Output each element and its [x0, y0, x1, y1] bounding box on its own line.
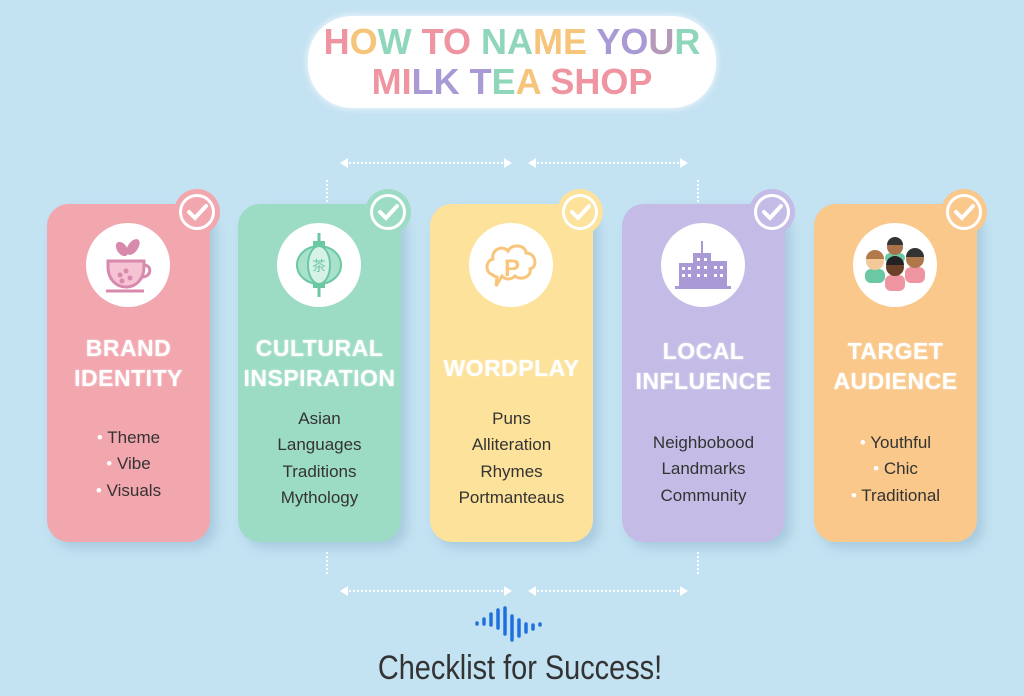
bullets: Languages: [277, 435, 362, 454]
bullets: Mythology: [281, 488, 358, 507]
heading: LOCAL: [663, 338, 744, 364]
icon: sound wave: [475, 606, 542, 642]
icon: people: [853, 223, 937, 307]
bullets: • Theme: [97, 428, 160, 447]
heading: AUDIENCE: [833, 368, 958, 394]
footer text: Checklist for Success!: [378, 649, 662, 687]
heading: WORDPLAY: [443, 355, 580, 381]
heading: INFLUENCE: [635, 368, 772, 394]
check badge: [941, 189, 987, 235]
title: HOW TO NAME YOUR: [324, 21, 700, 62]
bullets: [851, 433, 940, 505]
heading: [74, 335, 183, 391]
check badge: [749, 189, 795, 235]
panel: cultural inspiration: [238, 204, 401, 542]
bullets: Community: [661, 486, 746, 505]
bullets: Alliteration: [472, 435, 551, 454]
check badge: [557, 189, 603, 235]
bullets: • Traditional: [851, 486, 940, 505]
panel: brand identity: [47, 204, 210, 542]
heading: INSPIRATION: [243, 365, 396, 391]
bullets: Neighbobood: [653, 433, 754, 452]
check badge: [365, 189, 411, 235]
bullets: [459, 409, 564, 507]
panel: local influence: [622, 204, 785, 542]
bullets: Rhymes: [480, 462, 543, 481]
heading: BRAND: [86, 335, 171, 361]
bottom arrows: [346, 590, 506, 592]
heading: [243, 335, 396, 391]
icon: speech bubble P: P: [504, 255, 520, 282]
bullets: • Youthful: [860, 433, 931, 452]
bullets: [277, 409, 362, 507]
bullets: [96, 428, 161, 500]
heading: CULTURAL: [256, 335, 383, 361]
icon: teacup: [86, 223, 170, 307]
icon: lantern: [277, 223, 361, 307]
check badge: [174, 189, 220, 235]
heading: [833, 338, 958, 394]
icon: lantern: 茶: [312, 256, 326, 276]
bullets: • Vibe: [106, 454, 151, 473]
bullets: Portmanteaus: [459, 488, 564, 507]
icon: city: [661, 223, 745, 307]
heading: [635, 338, 772, 394]
bullets: Landmarks: [661, 459, 746, 478]
bullets: Asian: [298, 409, 341, 428]
panel: wordplay: [430, 204, 593, 542]
panel: target audience: [814, 204, 977, 542]
icon: speech bubble P: [469, 223, 553, 307]
title: [308, 16, 716, 108]
bullets: Traditions: [282, 462, 356, 481]
bullets: • Chic: [873, 459, 918, 478]
bullets: Puns: [492, 409, 531, 428]
bullets: [653, 433, 754, 505]
top arrows: [346, 162, 506, 164]
bullets: • Visuals: [96, 481, 161, 500]
title: MILK TEA SHOP: [372, 61, 652, 102]
heading: IDENTITY: [74, 365, 183, 391]
heading: TARGET: [848, 338, 943, 364]
